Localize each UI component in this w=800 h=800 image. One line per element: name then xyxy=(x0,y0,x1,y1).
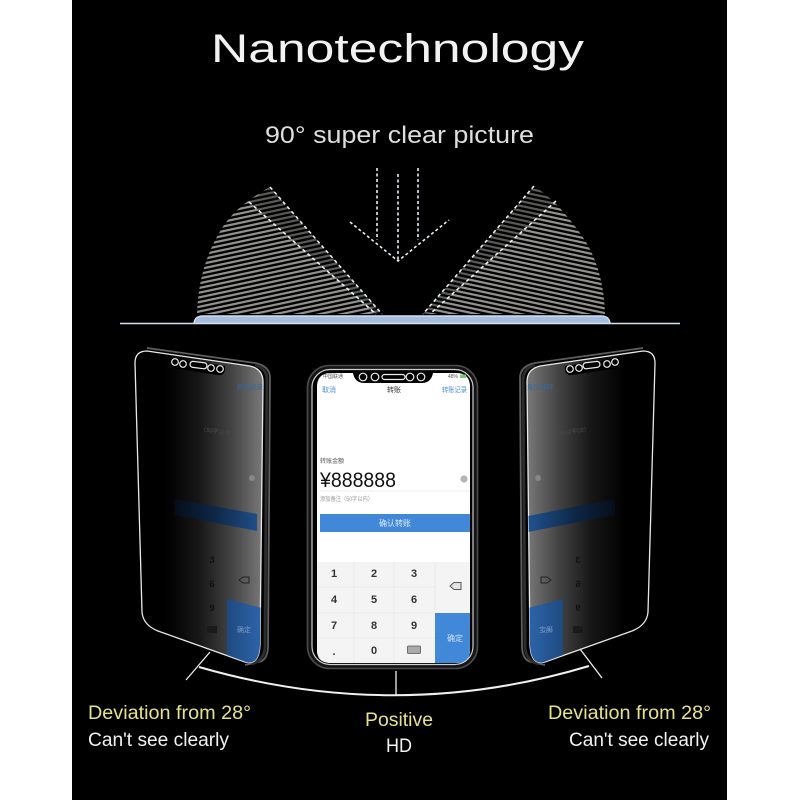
status bar: 中国联通 xyxy=(323,373,343,380)
dim screen content: （50字以内） xyxy=(553,425,590,438)
keypad: 8 xyxy=(371,620,377,632)
dim screen content xyxy=(526,358,622,668)
screen xyxy=(135,351,263,663)
dim screen content: 确定 xyxy=(539,625,553,634)
clear button xyxy=(460,475,468,483)
left hatched fan xyxy=(197,187,382,314)
dim screen content xyxy=(168,358,264,668)
left label: Deviation from 28° xyxy=(88,703,251,724)
keypad: 确定 xyxy=(447,633,463,643)
status bar xyxy=(323,373,466,380)
dim screen content: 3 xyxy=(575,555,581,565)
right label: Can't see clearly xyxy=(569,730,709,751)
navigation bar: 转账记录 xyxy=(442,385,467,394)
center label: Positive xyxy=(365,710,433,731)
dim screen content: 6 xyxy=(575,579,581,589)
viewing angle arc with ticks xyxy=(186,649,602,695)
dim screen content: （50字以内） xyxy=(200,425,237,438)
keypad: 4 xyxy=(331,594,338,606)
right hatched fan xyxy=(423,186,605,314)
left phone: dark at an angle xyxy=(135,348,270,668)
keypad: 0 xyxy=(371,645,377,657)
right phone: mirrored, dark at an angle xyxy=(520,348,655,668)
center phone: clear transfer screen xyxy=(308,366,478,668)
dim screen content: 6 xyxy=(209,579,215,589)
phone body xyxy=(308,366,478,668)
amount label: 转账金额 xyxy=(320,457,344,465)
confirm button xyxy=(320,514,470,532)
notch sensors xyxy=(567,359,618,372)
keypad: 9 xyxy=(411,620,417,632)
screen protector base xyxy=(120,316,680,324)
arrow: straight-on view xyxy=(350,168,449,261)
keypad: 2 xyxy=(371,568,377,580)
navigation bar: 取消 xyxy=(322,385,336,394)
subtitle: 90° super clear picture xyxy=(265,122,534,149)
keypad: 7 xyxy=(331,620,337,632)
keypad xyxy=(317,562,470,663)
keypad: 3 xyxy=(411,568,417,580)
center label: HD xyxy=(386,736,412,757)
notch sensors xyxy=(172,359,223,372)
right label xyxy=(548,703,711,751)
phone body, visible along top and side xyxy=(520,348,643,665)
keypad: 5 xyxy=(371,594,377,606)
note placeholder: 添加备注（50字以内） xyxy=(320,495,373,503)
dim screen content: 9 xyxy=(575,603,581,613)
dim screen content: 确定 xyxy=(237,625,251,634)
dim screen content: 9 xyxy=(209,603,215,613)
right label: Deviation from 28° xyxy=(548,703,711,724)
left label: Can't see clearly xyxy=(88,730,230,751)
title: Nanotechnology xyxy=(211,27,584,71)
navigation bar: 转账 xyxy=(387,385,401,394)
keypad: 1 xyxy=(331,568,337,580)
dim screen content: 3 xyxy=(209,555,215,565)
keypad: . xyxy=(332,646,336,658)
left label xyxy=(88,703,251,751)
white screen xyxy=(317,373,470,663)
divider under amount xyxy=(320,490,470,492)
dim screen content: 转账记录 xyxy=(237,382,264,391)
amount value: ¥888888 xyxy=(319,469,396,492)
screen xyxy=(527,351,655,663)
navigation bar xyxy=(322,385,467,394)
confirm button: 确认转账 xyxy=(379,518,411,528)
phone body, visible along top and right side xyxy=(147,348,270,665)
bezel outline xyxy=(312,370,473,664)
notch sensors xyxy=(359,373,425,381)
dim screen content: 转账记录 xyxy=(526,382,553,391)
keypad: 6 xyxy=(411,594,417,606)
status bar: 48% xyxy=(448,374,459,380)
diagram: viewing angle xyxy=(120,168,680,324)
center label xyxy=(365,710,433,757)
